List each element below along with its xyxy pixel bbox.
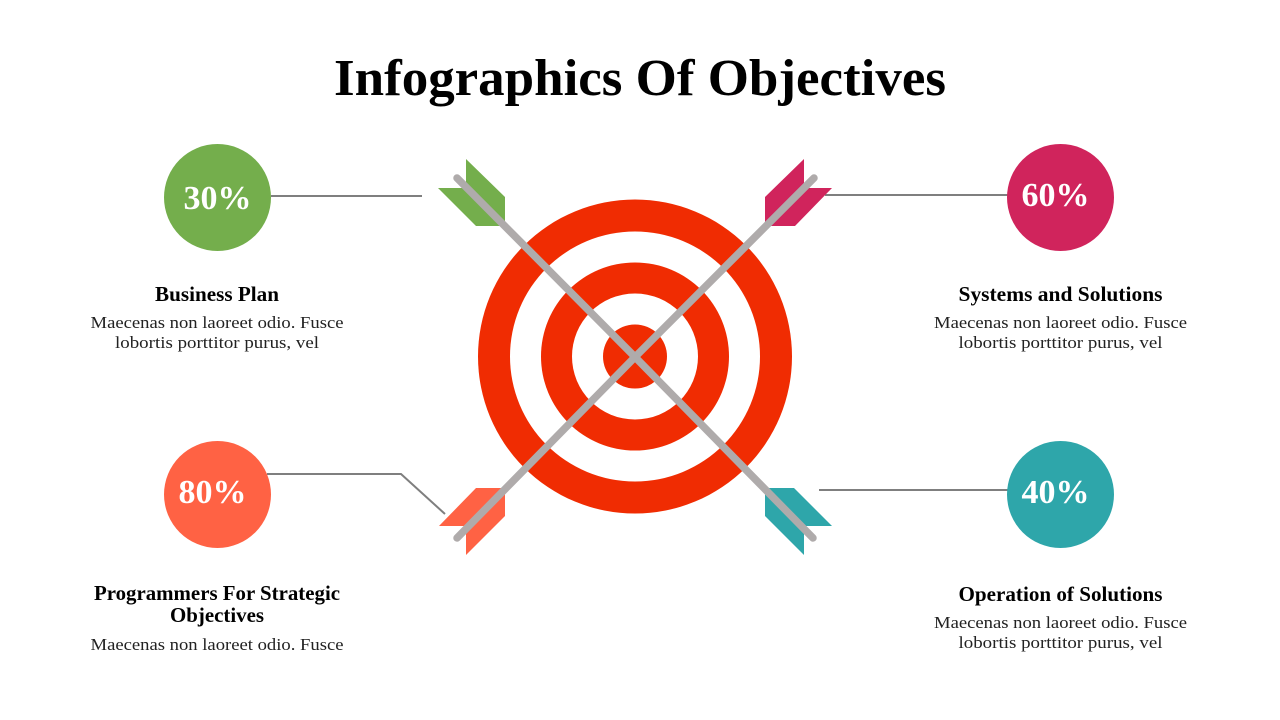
arrow: green xyxy=(438,159,635,357)
arrow: pink xyxy=(635,159,832,357)
arrow: orange xyxy=(439,357,635,555)
text: Business Plan: lobortis porttitor purus, vel xyxy=(115,333,319,352)
text: Programmers For Strategic Objectives: Programmers For Strategic xyxy=(94,581,340,605)
connector: 60% xyxy=(825,194,1008,196)
text: Systems and Solutions: Maecenas non laoreet odio. Fusce xyxy=(934,313,1187,332)
text: Operation of Solutions: Maecenas non laoreet odio. Fusce xyxy=(934,613,1187,632)
connector: 80% xyxy=(267,474,445,514)
text: Operation of Solutions: Operation of Solutions xyxy=(958,582,1162,606)
text: Business Plan: Maecenas non laoreet odio. Fusce xyxy=(90,313,344,332)
badge: 40%: 40% xyxy=(1022,474,1090,511)
badge: 60% xyxy=(1007,144,1114,251)
text: Programmers For Strategic Objectives: Objectives xyxy=(170,603,264,627)
text: Business Plan: Business Plan xyxy=(155,282,279,306)
text: Business Plan xyxy=(90,282,344,352)
text: Systems and Solutions: lobortis porttitor purus, vel xyxy=(958,333,1163,352)
arrow: teal xyxy=(635,357,832,555)
connector: 40% xyxy=(819,489,1008,491)
connector: 30% xyxy=(271,195,422,197)
badge: 30%: 30% xyxy=(184,180,252,217)
badge: 60%: 60% xyxy=(1022,177,1090,214)
badge: 80% xyxy=(164,441,271,548)
text: Operation of Solutions: lobortis porttitor purus, vel xyxy=(958,633,1163,652)
badge: 80%: 80% xyxy=(178,474,246,511)
text: Programmers For Strategic Objectives: Maecenas non laoreet odio. Fusce xyxy=(90,635,344,654)
text: Systems and Solutions: Systems and Solutions xyxy=(958,282,1162,306)
badge: 40% xyxy=(1007,441,1114,548)
text: Systems and Solutions xyxy=(934,282,1187,352)
badge: 30% xyxy=(164,144,271,251)
text: Programmers For Strategic Objectives xyxy=(90,581,344,654)
target xyxy=(478,200,792,514)
title: Infographics Of Objectives xyxy=(334,50,946,107)
text: Operation of Solutions xyxy=(934,582,1187,652)
